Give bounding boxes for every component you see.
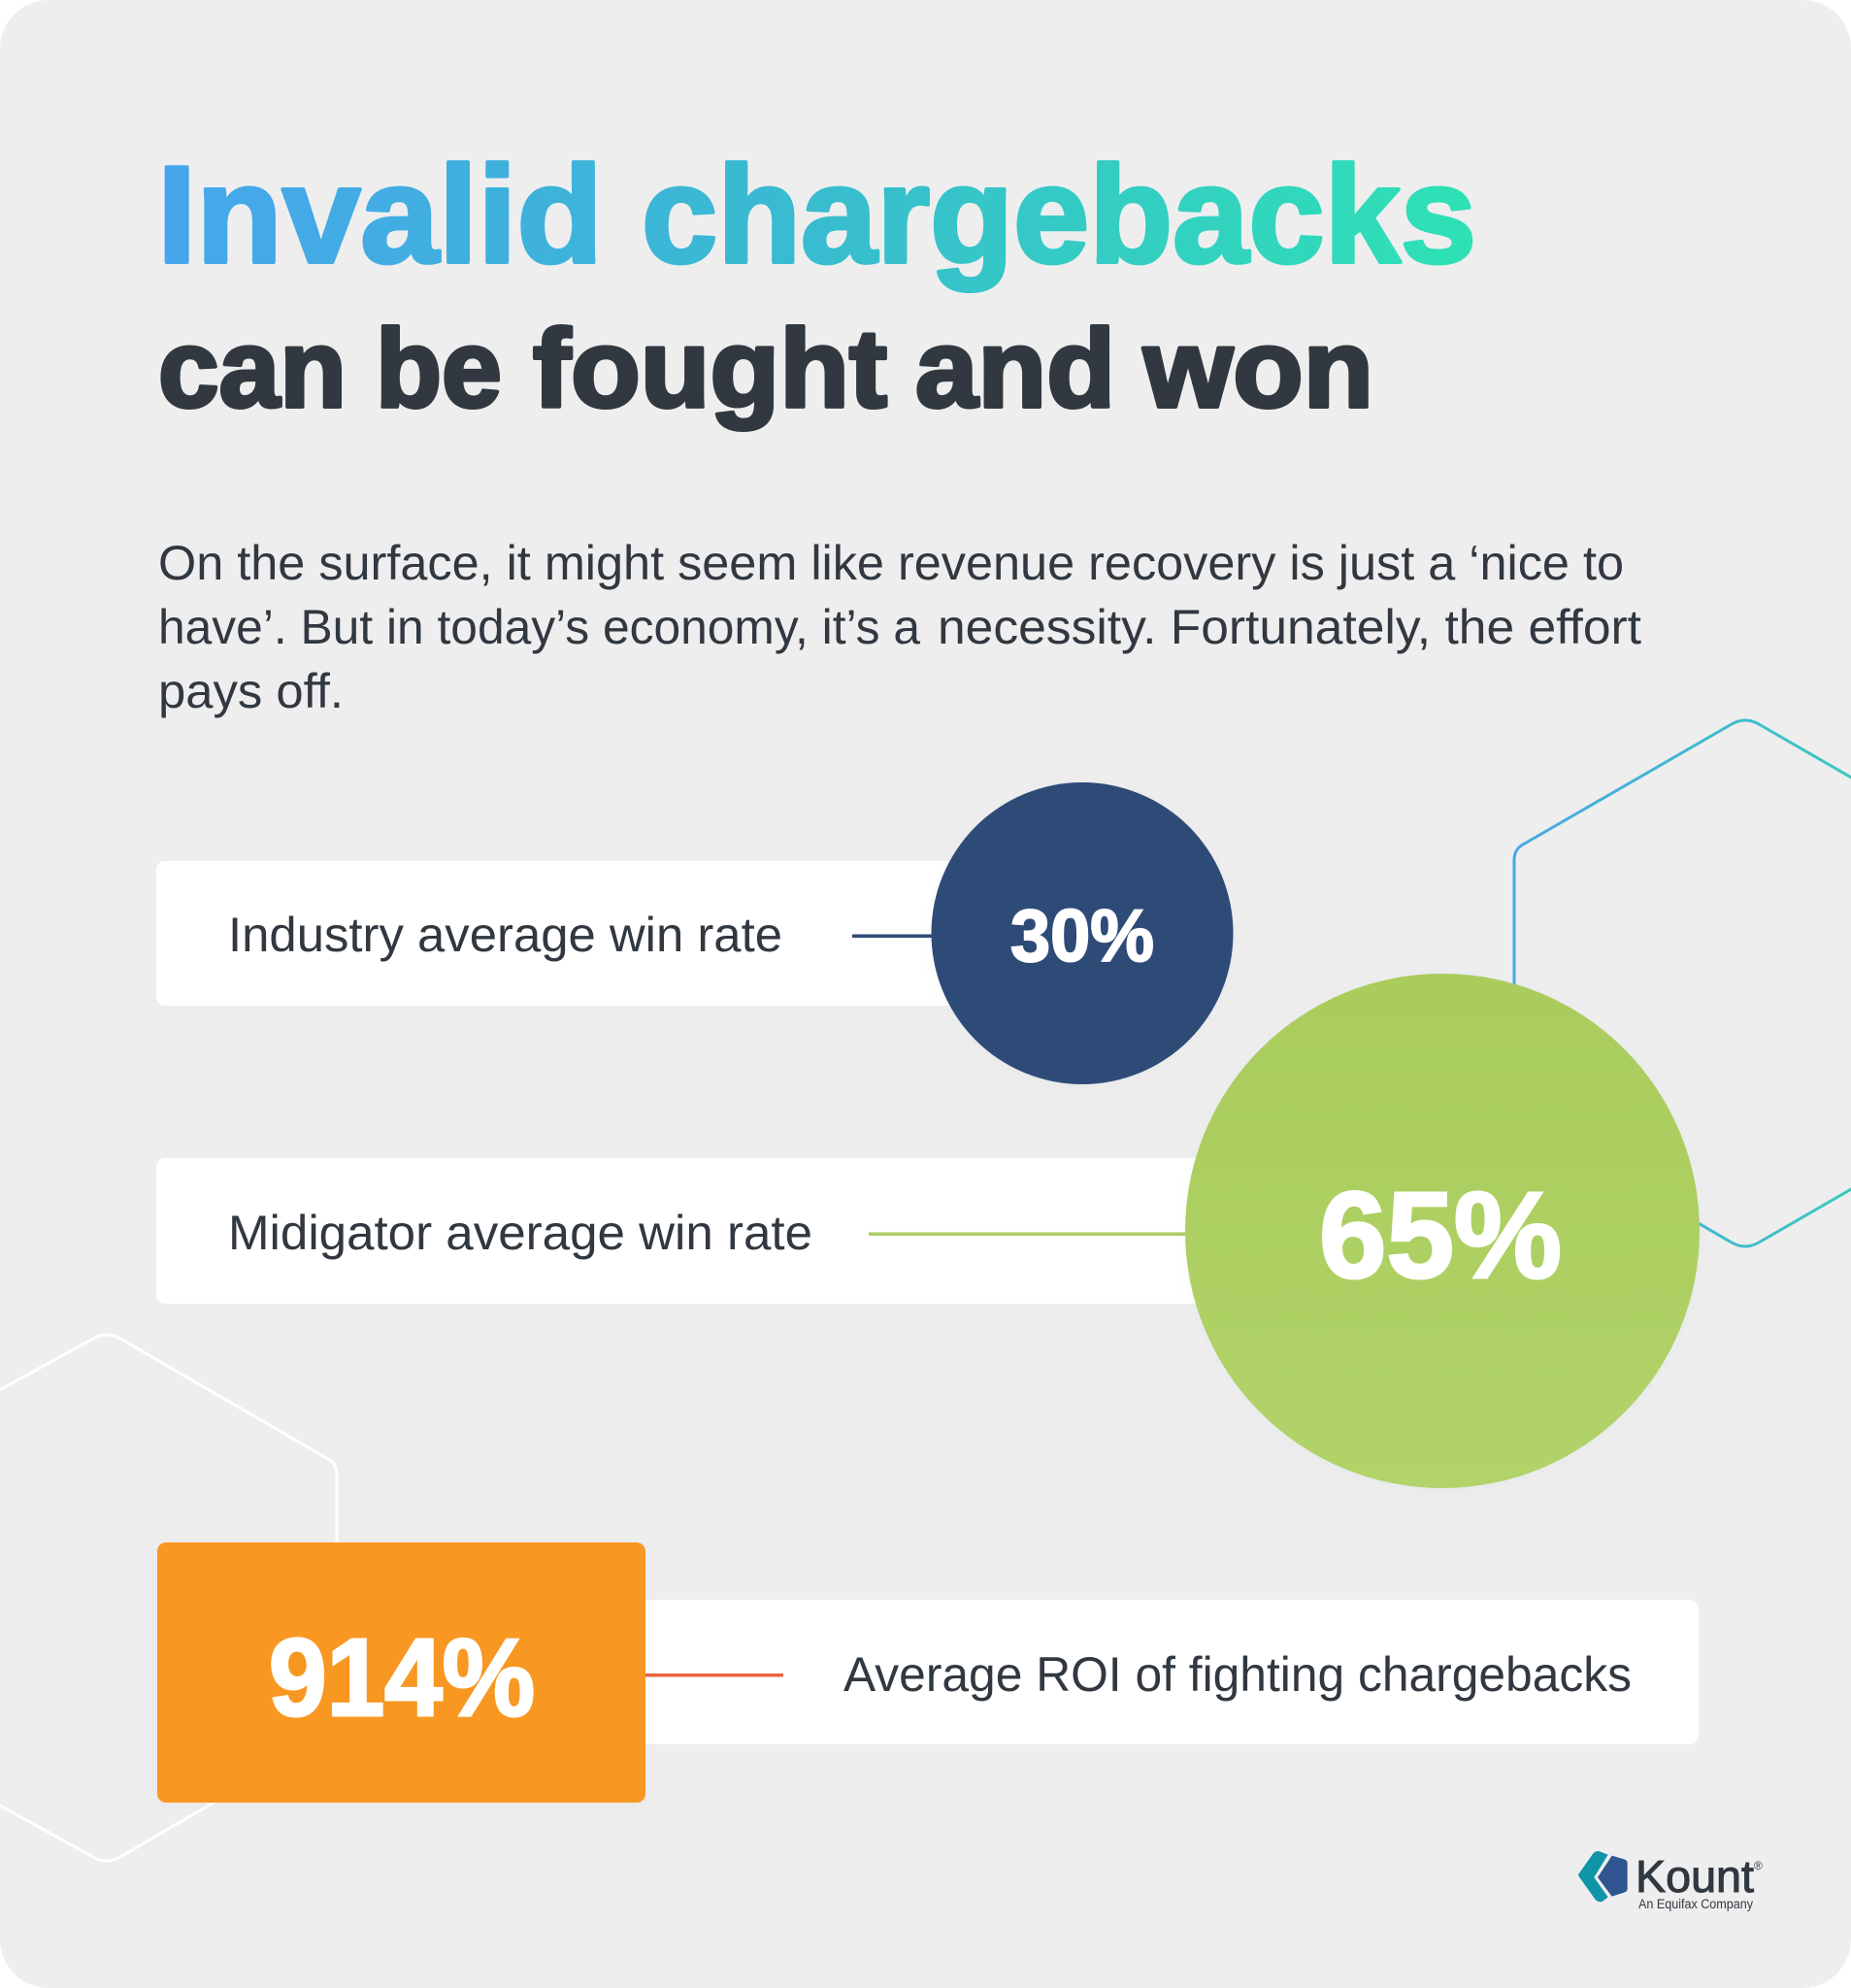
title: [157, 138, 1476, 431]
label text: Midigator average win rate: [228, 1206, 812, 1260]
title line 1: gradient: [157, 138, 1476, 292]
stat row: Midigator average win rate: [156, 974, 1700, 1488]
65 percent value: 65%: [1319, 1167, 1562, 1304]
intro paragraph: necessity. Fortunately, the effort: [938, 600, 1641, 654]
white label card: [621, 1600, 1699, 1744]
stat row: average ROI of fighting chargebacks: [157, 1542, 1699, 1803]
intro paragraph: have’. But in today’s economy, it’s a: [158, 600, 920, 654]
registered mark: ®: [1754, 1859, 1763, 1872]
navy circle: [932, 782, 1233, 1084]
title line 2: dark: won: [1142, 308, 1373, 431]
title line 2: dark: [158, 308, 1373, 431]
title line 1: gradient: Invalid: [157, 138, 603, 292]
label text: Industry average win rate: [228, 908, 782, 962]
green circle: [1185, 974, 1700, 1488]
title line 1: gradient: chargebacks: [642, 138, 1476, 292]
white label card: [156, 861, 991, 1006]
intro paragraph: On the surface, it might seem like revenue recovery is just a ‘nice to: [158, 536, 1624, 590]
title line 2: dark: be: [376, 308, 502, 431]
label text: Average ROI of fighting chargebacks: [843, 1647, 1632, 1702]
connector line: [852, 934, 934, 938]
914 percent value: 914%: [269, 1616, 535, 1739]
logo wordmark: Kount: [1636, 1851, 1754, 1902]
title line 2: dark: fought: [533, 308, 887, 431]
intro paragraph: pays off.: [158, 664, 344, 718]
30 percent value: 30%: [1010, 895, 1154, 977]
stat row: industry average win rate: [156, 782, 1233, 1084]
title line 2: dark: and: [915, 308, 1115, 431]
orange value box: [157, 1542, 645, 1803]
white label card: [156, 1158, 1224, 1304]
decorative hexagon: white outline: [0, 1335, 337, 1861]
title line 2: dark: can: [158, 308, 347, 431]
intro paragraph: [158, 536, 1641, 718]
Kount logo: [1578, 1851, 1763, 1911]
decorative hexagon: blue-teal outline: [1514, 720, 1851, 1246]
connector line: [645, 1673, 783, 1677]
logo icon: [1578, 1851, 1628, 1902]
logo tagline: An Equifax Company: [1638, 1897, 1753, 1911]
connector line: [869, 1233, 1189, 1236]
